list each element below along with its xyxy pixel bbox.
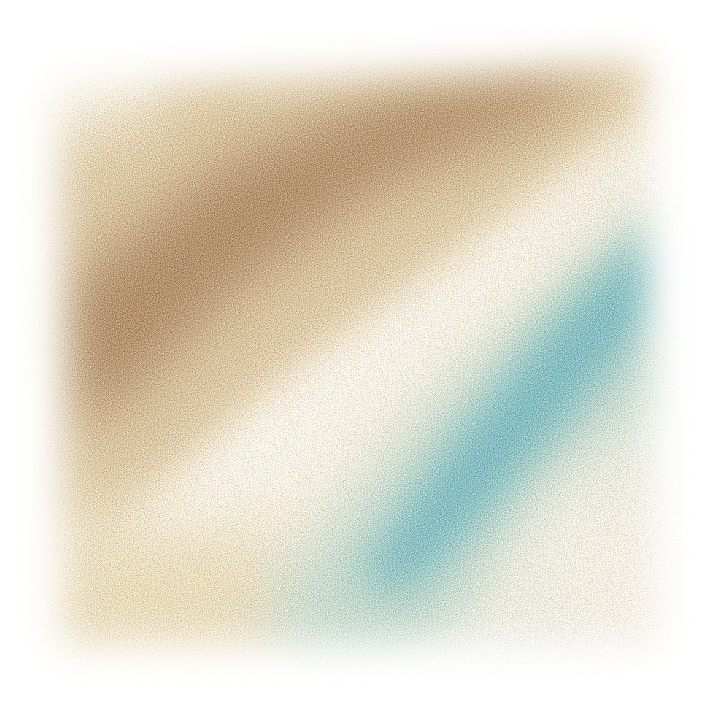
beige wash lower left bbox=[47, 507, 298, 659]
brown diagonal core bbox=[60, 60, 590, 430]
pale top-left corner bbox=[46, 70, 180, 166]
sage transition under the teal band bbox=[252, 184, 672, 662]
teal core bbox=[355, 230, 665, 595]
base cream bbox=[47, 50, 679, 668]
pale green wash lower right bbox=[508, 407, 645, 644]
tan wash upper left bbox=[39, 43, 662, 538]
cream bottom-right corner bbox=[542, 486, 660, 644]
cream highlight band bbox=[120, 125, 640, 535]
